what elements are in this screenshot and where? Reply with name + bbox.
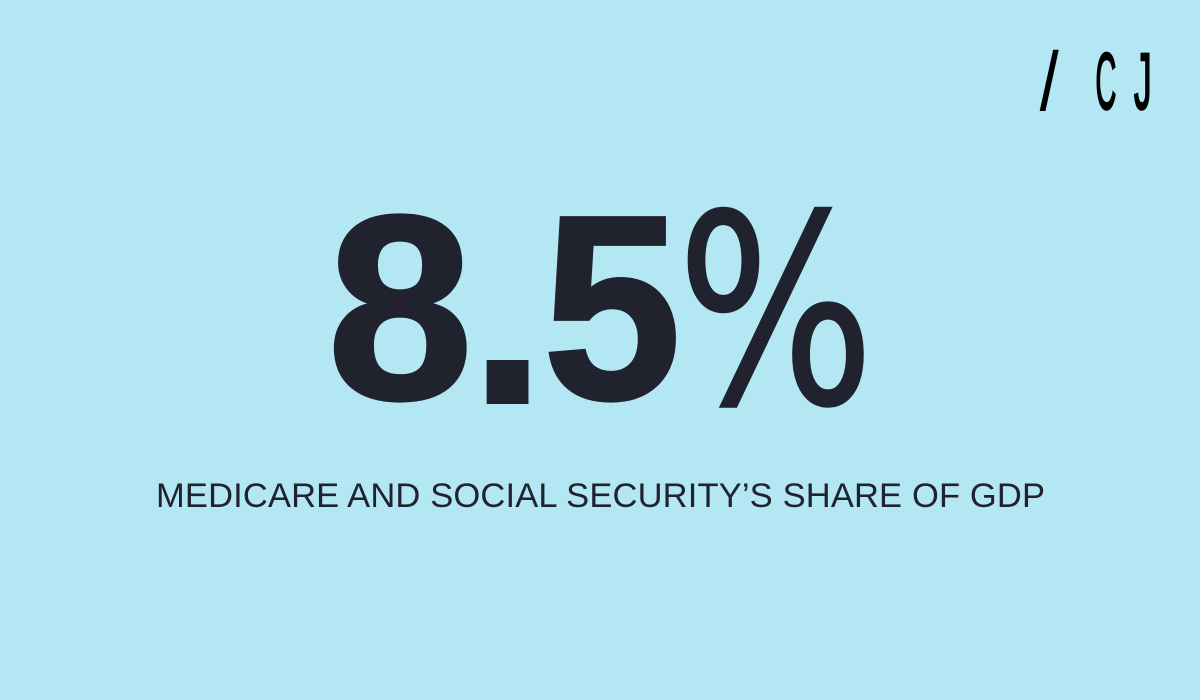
big statistic: 8.5%: . [470, 154, 546, 462]
big statistic: 8.5%: % [677, 159, 874, 465]
logo: CJ: J [1134, 37, 1152, 127]
big statistic: 8.5%: 5 [542, 162, 681, 455]
logo: CJ: C [1096, 37, 1116, 126]
big statistic: 8.5%: 8 [327, 160, 473, 454]
logo: CJ [1040, 35, 1152, 128]
caption: MEDICARE AND SOCIAL SECURITY’S SHARE OF GDP [156, 477, 1045, 515]
logo: CJ: / [1040, 35, 1059, 128]
big statistic: 8.5% [327, 154, 874, 465]
